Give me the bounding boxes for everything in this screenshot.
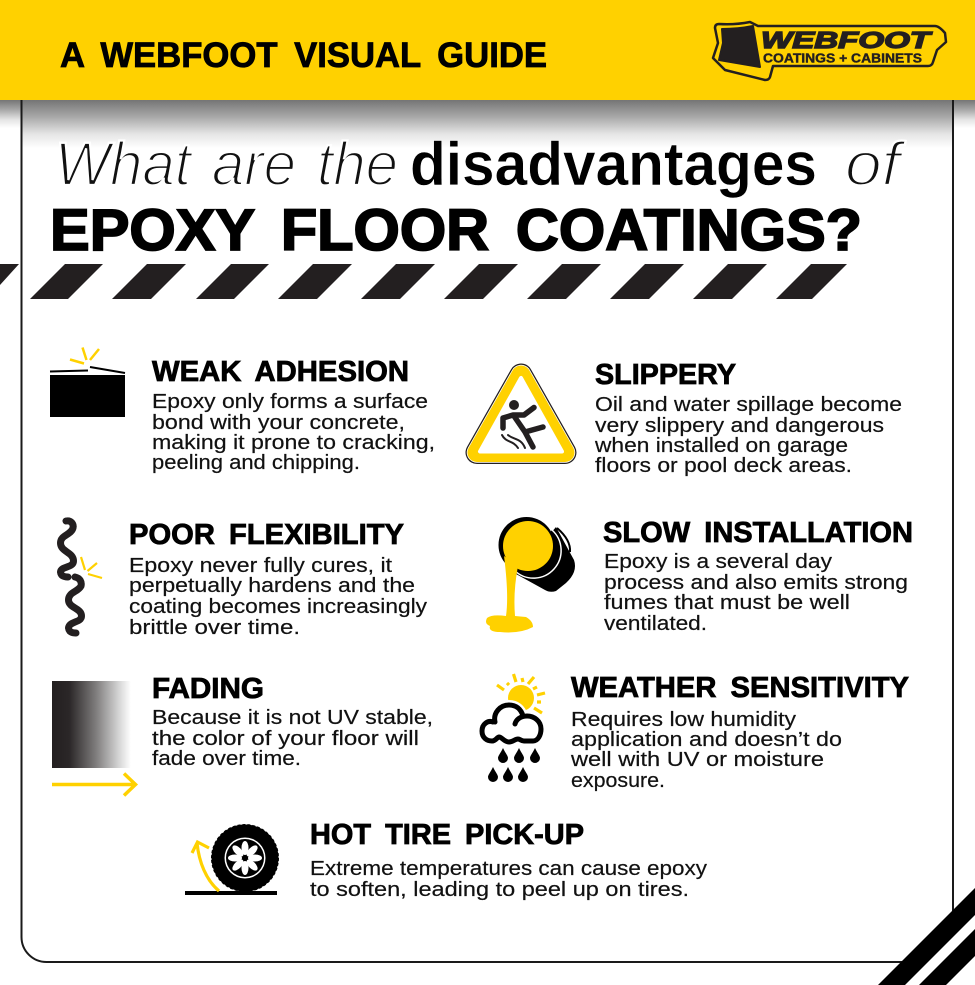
text: hot tire pick-up: HOT TIRE PICK-UP [310,819,584,851]
text: weather sensitivity [570,672,909,792]
corner stripes [878,888,975,985]
text: hot tire pick-up: to soften, leading to peel up on tires. [310,879,689,901]
text: weak adhesion [152,356,435,474]
text: slippery: Oil and water spillage become [595,394,902,416]
text: fading: Because it is not UV stable, [152,707,433,729]
logo: Webfoot Coatings + Cabinets: WEBFOOT [761,27,933,53]
icon: fading swatch [52,681,136,796]
icon: hot tire [185,824,278,895]
text: weather sensitivity: Requires low humidity [571,709,796,731]
text: fading: fade over time. [152,748,301,770]
text: poor flexibility: perpetually hardens and the [129,575,415,597]
text: slow installation: SLOW INSTALLATION [603,517,913,549]
text: slippery: SLIPPERY [595,359,736,391]
text: weather sensitivity: application and doesn’t do [571,729,842,751]
text: poor flexibility: Epoxy never fully cures, it [129,555,393,577]
icon: slippery warning sign [477,375,565,452]
icon: poor flexibility crack [60,521,102,633]
main title: disadvantages [410,130,817,198]
header shadow [0,100,975,148]
text: slippery [594,359,902,477]
icon: weather sun cloud rain [482,674,545,782]
text: fading [152,673,433,770]
text: slow installation: fumes that must be well [604,592,850,614]
text: poor flexibility [129,519,427,639]
text: weak adhesion: peeling and chipping. [152,452,360,474]
icon: weak adhesion [50,348,125,417]
main title [50,130,907,263]
logo: Webfoot Coatings + Cabinets [713,22,946,80]
text: slippery: very slippery and dangerous [595,415,884,437]
text: hot tire pick-up [310,819,707,901]
text: slippery: floors or pool deck areas. [595,455,852,477]
text: poor flexibility: brittle over time. [129,617,300,639]
text: slow installation: ventilated. [604,613,707,635]
text: weak adhesion: making it prone to cracking, [152,432,435,454]
text: slow installation: Epoxy is a several day [604,551,832,573]
text: weather sensitivity: WEATHER SENSITIVITY [571,672,909,704]
text: slow installation: process and also emits strong [604,572,908,594]
text: weak adhesion: bond with your concrete, [152,412,405,434]
hazard stripes [0,264,847,299]
header title: A WEBFOOT VISUAL GUIDE [60,36,547,75]
text: fading: the color of your floor will [152,728,419,750]
text: hot tire pick-up: Extreme temperatures can cause epoxy [310,858,707,880]
text: slow installation [603,517,913,635]
text: fading: FADING [152,673,264,705]
text: weak adhesion: Epoxy only forms a surface [152,391,428,413]
header band [0,0,975,100]
main title: What are the [55,130,398,198]
text: slippery: when installed on garage [594,435,848,457]
text: weather sensitivity: exposure. [571,770,665,792]
text: weather sensitivity: well with UV or moisture [570,749,824,771]
main title: of [845,130,907,198]
logo: Webfoot Coatings + Cabinets: COATINGS + CABINETS [763,50,922,66]
main title: EPOXY FLOOR COATINGS? [50,198,862,263]
text: weak adhesion: WEAK ADHESION [152,356,409,388]
icon: paint can pouring [486,517,575,632]
text: poor flexibility: POOR FLEXIBILITY [129,519,404,551]
text: poor flexibility: coating becomes increasingly [129,596,427,618]
